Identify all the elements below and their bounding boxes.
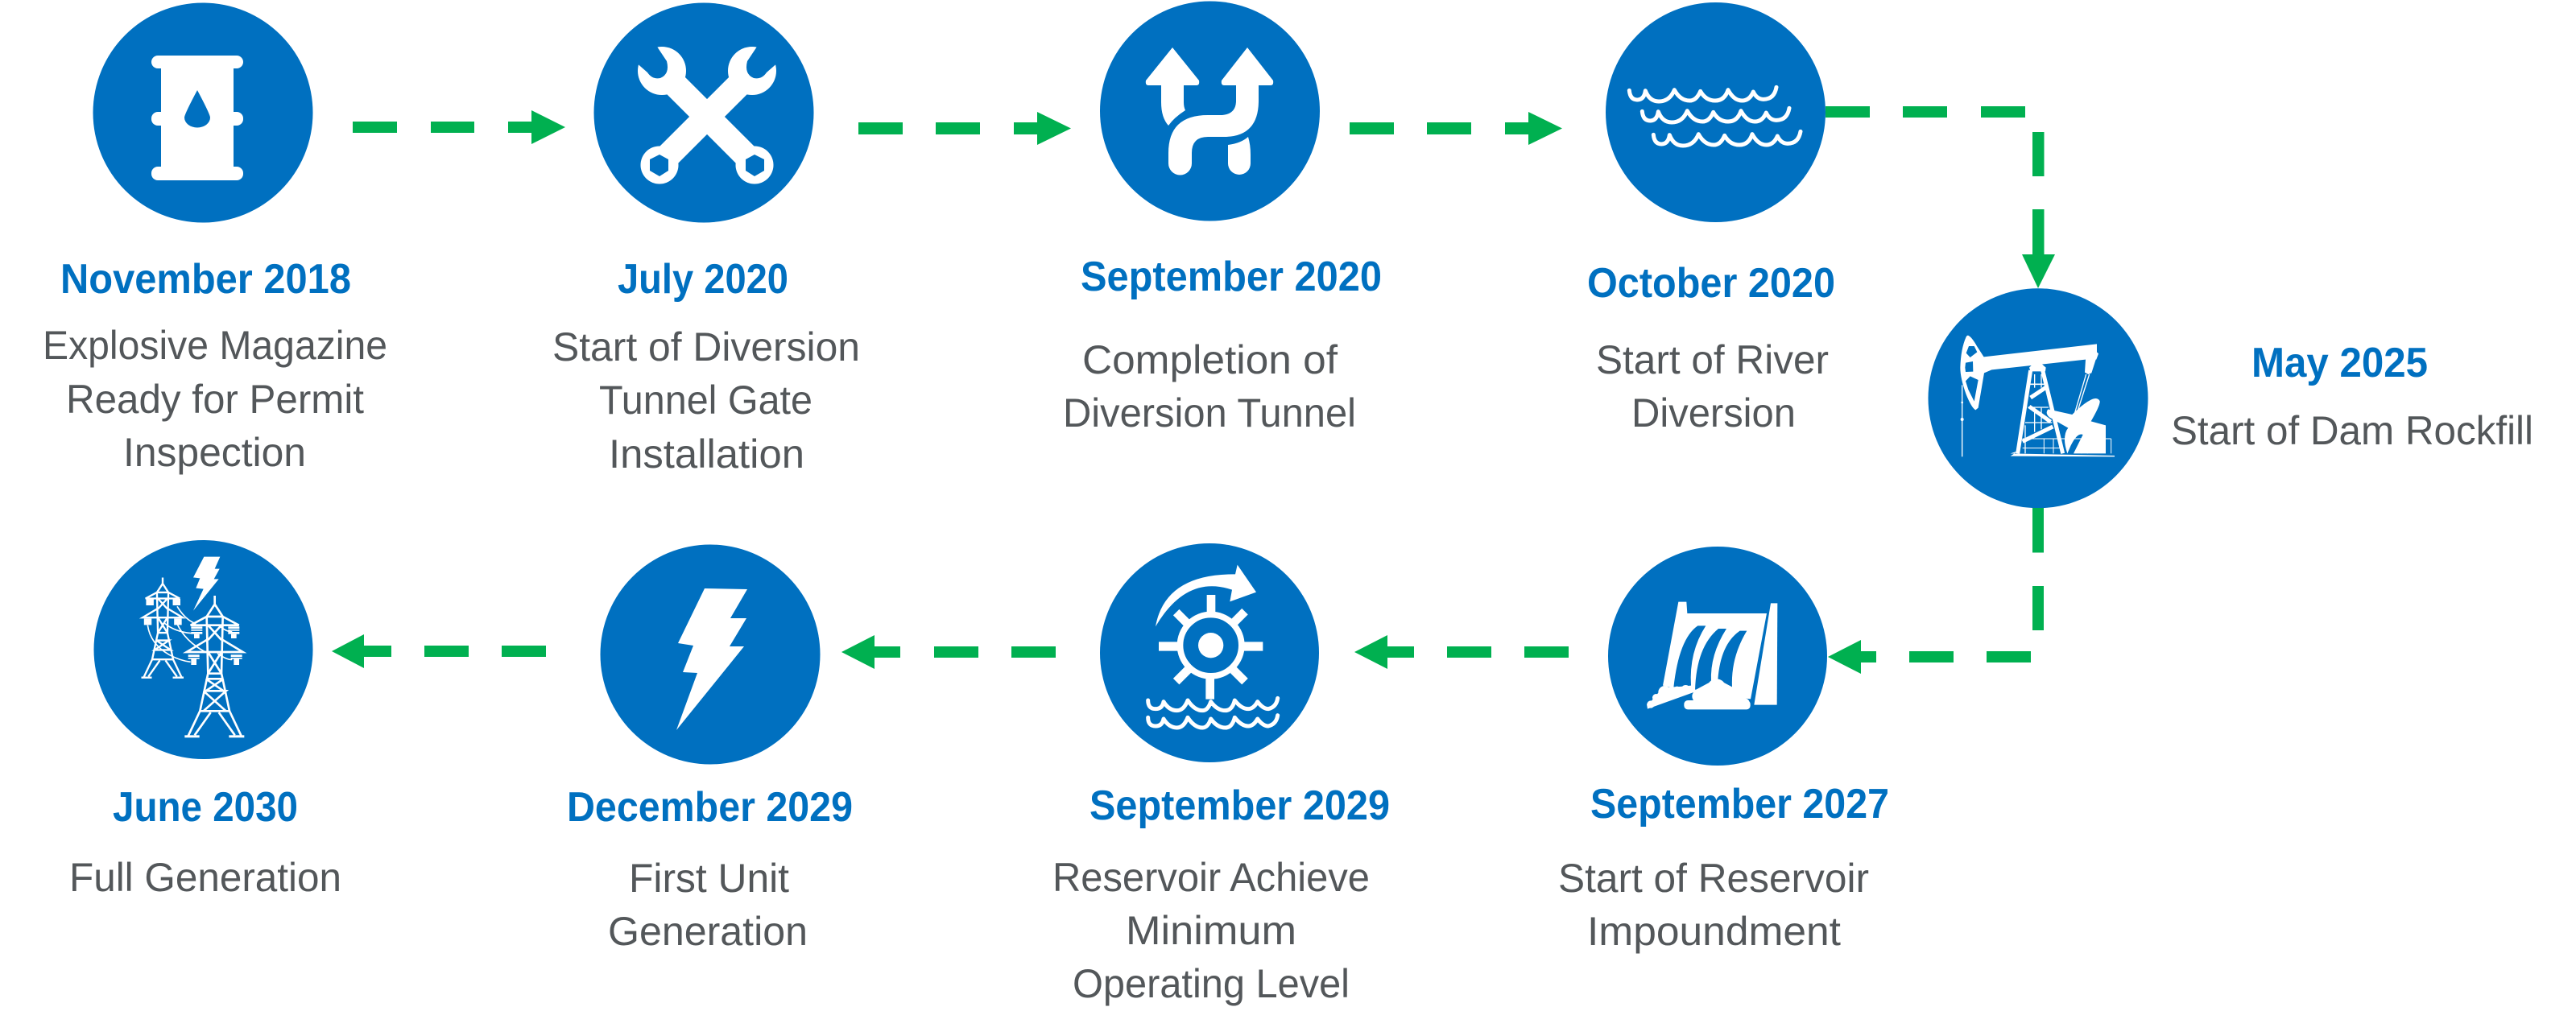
- description: Start of Diversion Tunnel Gate Installation: Tunnel Gate: [599, 378, 812, 423]
- description: Explosive Magazine Ready for Permit Inspection: Inspection: [123, 430, 306, 475]
- arrow: September 2020 to October 2020: [1350, 112, 1562, 145]
- date: October 2020: October 2020: [1587, 260, 1835, 307]
- description: Full Generation: Full Generation: [69, 855, 341, 900]
- icon: lightning bolt in blue circle: [601, 544, 820, 765]
- icon: transmission towers and bolt in blue circle: [93, 540, 312, 759]
- icon: dam spillway in blue circle: [1608, 547, 1827, 766]
- icon: diverging arrows in blue circle: [1100, 2, 1320, 221]
- description: First Unit Generation: First Unit: [629, 856, 789, 901]
- arrow: October 2020 to May 2025: [1826, 106, 2055, 288]
- icon: oil pumpjack in blue circle: [1928, 288, 2148, 508]
- description: First Unit Generation: [608, 856, 808, 954]
- description: Start of Reservoir Impoundment: Start of Reservoir: [1558, 856, 1869, 901]
- date: May 2025: May 2025: [2251, 340, 2428, 386]
- milestone: May 2025: [1928, 288, 2533, 508]
- milestone: June 2030: [69, 540, 341, 900]
- description: Reservoir Achieve Minimum Operating Level: Reservoir Achieve: [1052, 855, 1370, 900]
- description: Reservoir Achieve Minimum Operating Level: Minimum: [1126, 908, 1296, 953]
- icon: water waves in blue circle: [1606, 2, 1826, 222]
- milestone: November 2018: [43, 3, 387, 475]
- date: December 2029: December 2029: [567, 784, 853, 831]
- icon: crossed wrenches in blue circle: [594, 3, 813, 222]
- arrow: December 2029 to June 2030: [332, 634, 546, 668]
- description: Start of River Diversion: Start of River: [1596, 337, 1829, 382]
- description: Start of Reservoir Impoundment: Impoundment: [1587, 909, 1841, 954]
- date: June 2030: June 2030: [113, 784, 298, 831]
- arrow: May 2025 to September 2027: [1828, 508, 2044, 674]
- milestone: September 2029: [1052, 543, 1390, 1006]
- description: Explosive Magazine Ready for Permit Inspection: Ready for Permit: [66, 377, 364, 422]
- description: Start of Diversion Tunnel Gate Installation: Start of Diversion: [552, 324, 860, 369]
- description: Completion of Diversion Tunnel: Diversion Tunnel: [1063, 390, 1356, 435]
- milestone: October 2020: [1587, 2, 1835, 435]
- date: September 2029: September 2029: [1090, 782, 1390, 829]
- large tower (front): [187, 596, 243, 737]
- description: Explosive Magazine Ready for Permit Inspection: [43, 323, 387, 475]
- date: November 2018: November 2018: [60, 256, 351, 303]
- icon: turbine wheel over water in blue circle: [1100, 543, 1319, 762]
- description: Explosive Magazine Ready for Permit Inspection: Explosive Magazine: [43, 323, 387, 368]
- milestone: September 2027: [1558, 547, 1889, 954]
- date: July 2020: July 2020: [618, 256, 788, 303]
- description: Start of River Diversion: Diversion: [1631, 390, 1796, 435]
- arrow: September 2027 to September 2029: [1354, 635, 1569, 669]
- arrow: November 2018 to July 2020: [353, 110, 565, 144]
- milestone: September 2020: [1063, 2, 1382, 435]
- arrow: July 2020 to September 2020: [858, 112, 1071, 145]
- description: Start of Dam Rockfill: Start of Dam Rockfill: [2171, 408, 2533, 453]
- description: Start of Reservoir Impoundment: [1558, 856, 1869, 954]
- milestone: July 2020: [552, 3, 860, 477]
- arrow: September 2029 to December 2029: [841, 635, 1056, 669]
- description: Start of River Diversion: [1596, 337, 1829, 435]
- description: Reservoir Achieve Minimum Operating Level: [1052, 855, 1370, 1006]
- icon: oil barrel in blue circle: [93, 3, 312, 222]
- description: Start of Diversion Tunnel Gate Installation: Installation: [609, 431, 804, 477]
- description: Completion of Diversion Tunnel: [1063, 337, 1356, 435]
- date: September 2020: September 2020: [1081, 254, 1382, 300]
- milestone: December 2029: [567, 544, 853, 954]
- description: Reservoir Achieve Minimum Operating Level: Operating Level: [1073, 961, 1350, 1006]
- description: Completion of Diversion Tunnel: Completion of: [1082, 337, 1338, 382]
- description: Start of Diversion Tunnel Gate Installation: [552, 324, 860, 477]
- small tower (rear): [141, 577, 184, 679]
- description: First Unit Generation: Generation: [608, 909, 808, 954]
- date: September 2027: September 2027: [1590, 781, 1889, 828]
